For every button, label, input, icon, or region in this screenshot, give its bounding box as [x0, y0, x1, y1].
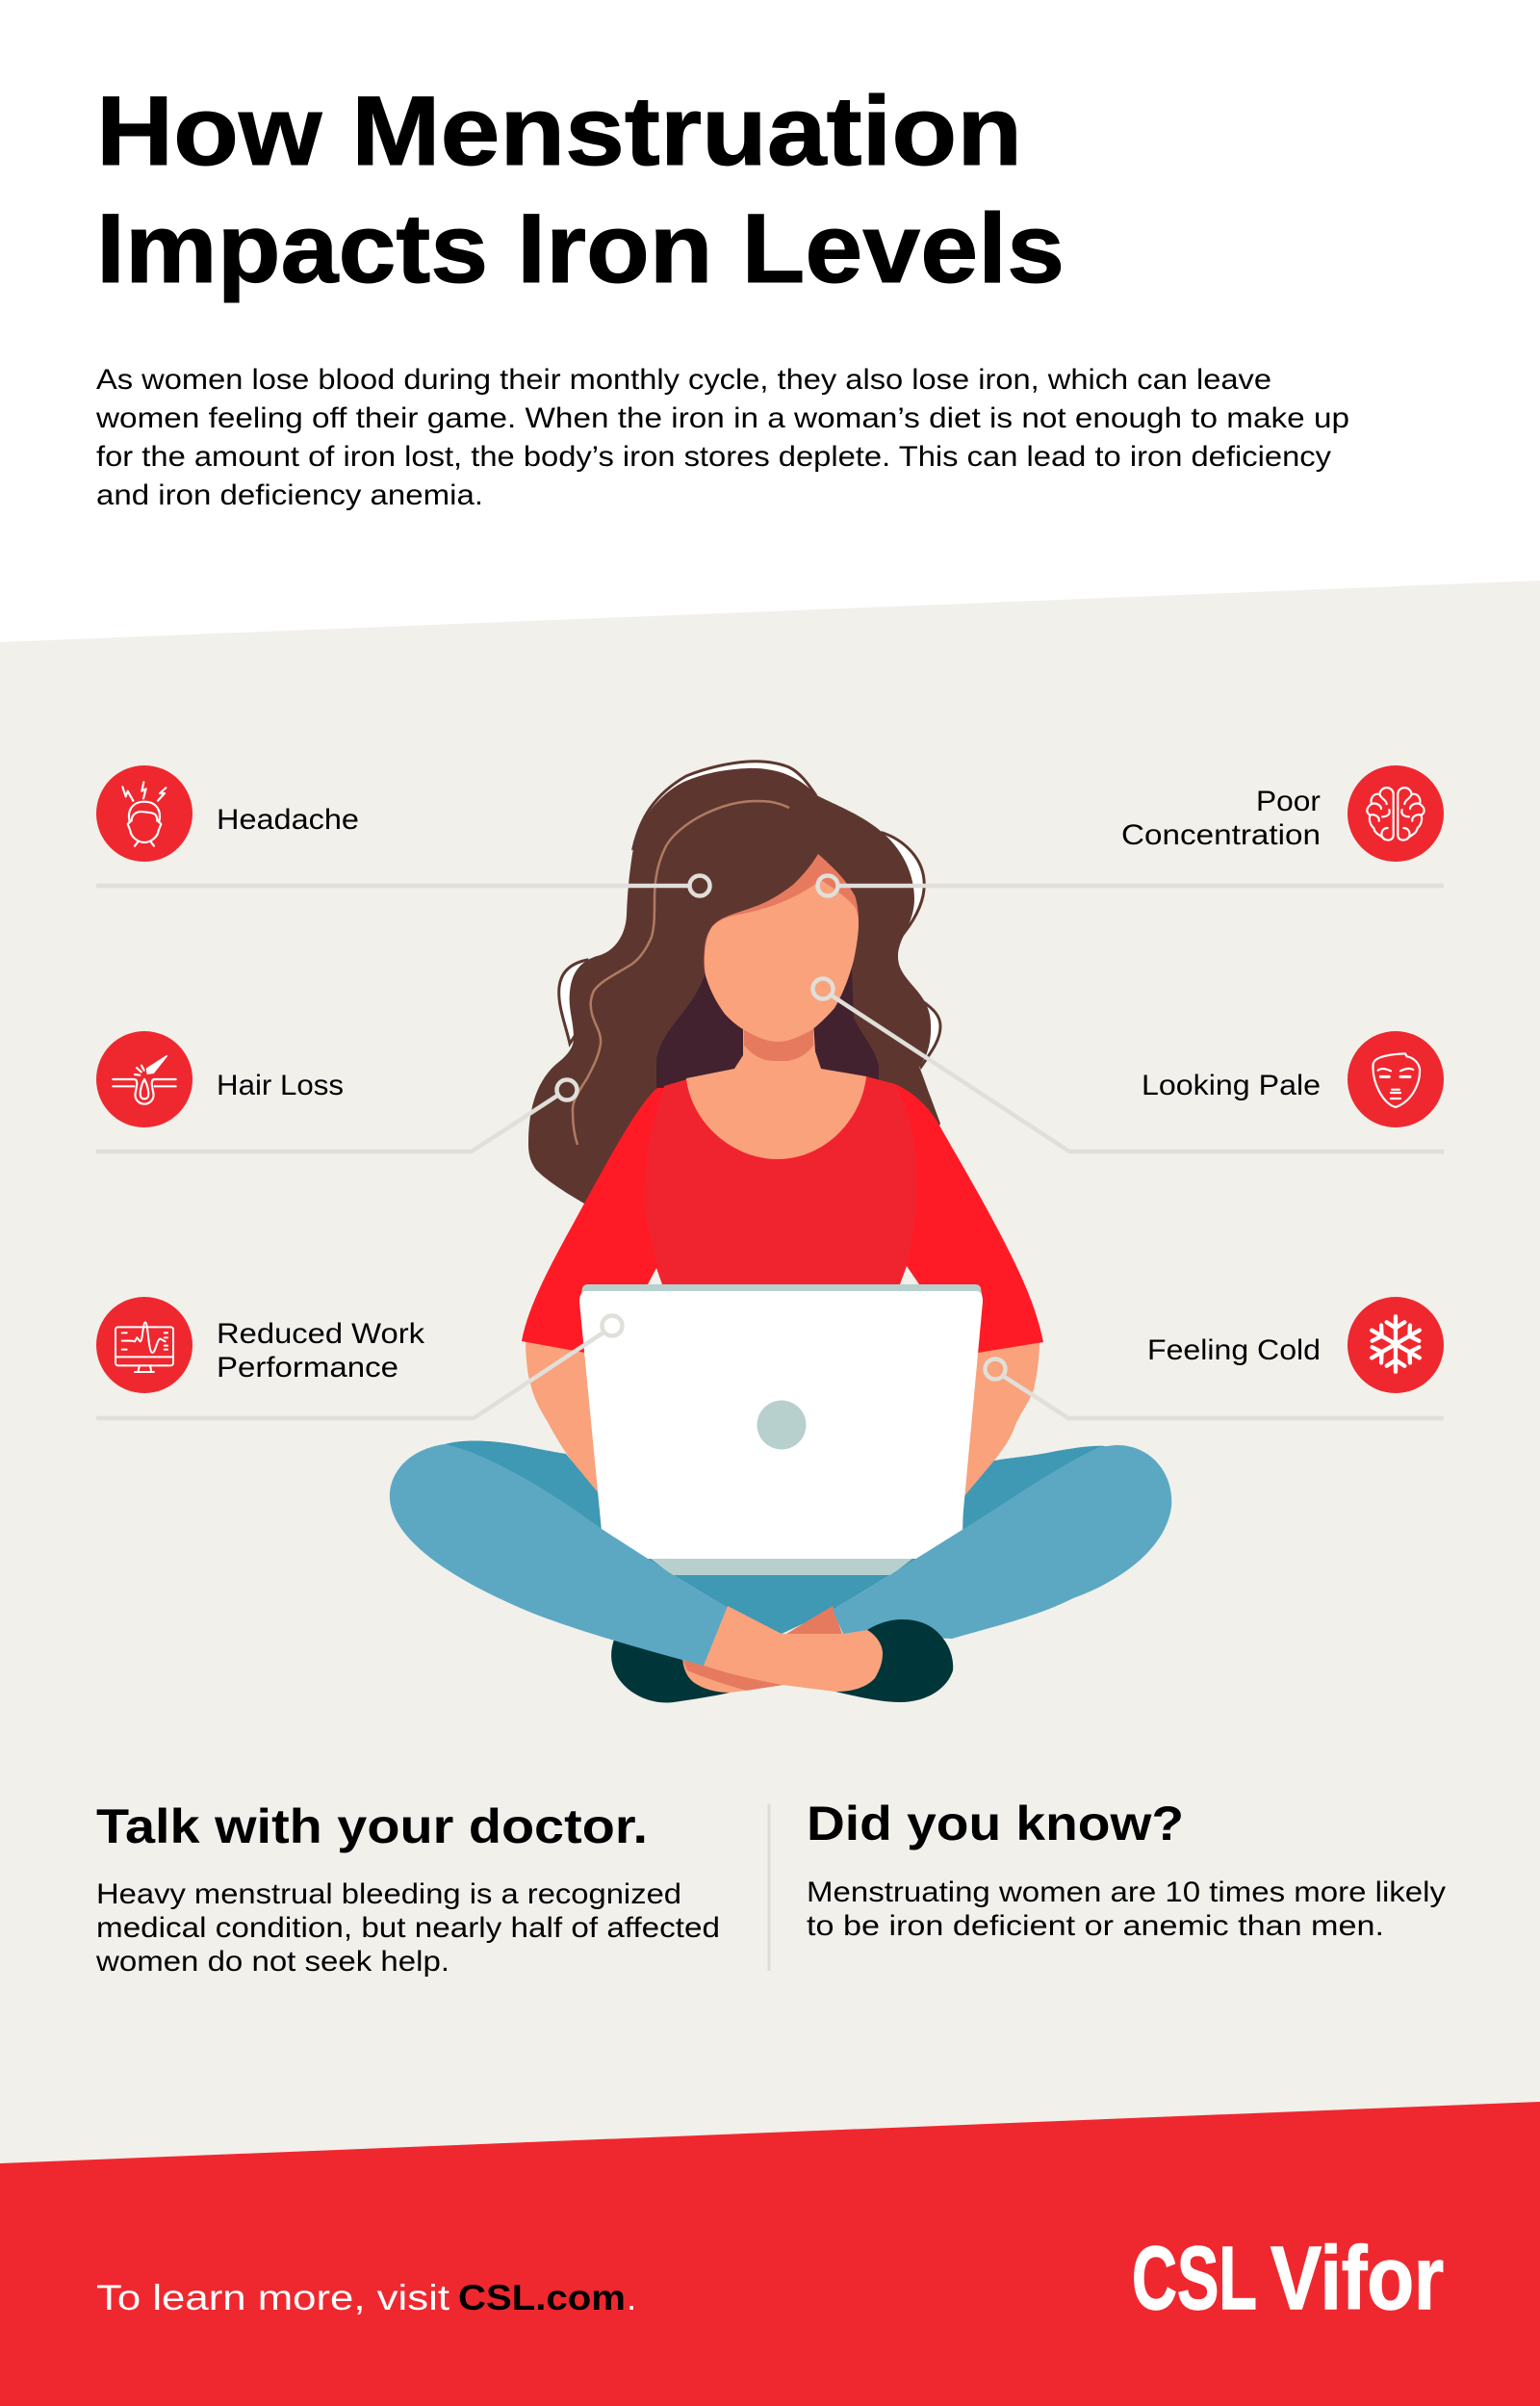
title: Impacts Iron Levels	[96, 194, 1065, 303]
upper foot	[704, 1606, 883, 1692]
text block: doctor advice: medical condition, but nearly half of affected	[96, 1912, 720, 1944]
text block: doctor advice	[95, 1878, 720, 1978]
connector rings	[556, 876, 1005, 1379]
neck and chest	[686, 1021, 866, 1159]
label: reduced work performance: Reduced Work	[217, 1318, 425, 1350]
left shoe	[611, 1640, 730, 1702]
logo: CSL Vifor: CSL	[1132, 2228, 1257, 2328]
connector lines	[96, 886, 1444, 1418]
label: feeling cold: Feeling Cold	[1147, 1334, 1321, 1366]
label: reduced work performance: Performance	[217, 1352, 398, 1384]
shirt sleeves	[522, 1084, 1043, 1353]
right leg	[833, 1445, 1171, 1639]
footer call to action: To learn more, visit	[96, 2278, 450, 2317]
hair	[528, 768, 940, 1203]
left leg	[390, 1444, 728, 1666]
logo: CSL Vifor: Vifor	[1270, 2228, 1444, 2328]
label: headache: Headache	[217, 804, 359, 836]
intro text block: and iron deficiency anemia.	[96, 479, 483, 511]
hair outline strands	[559, 762, 940, 1067]
footer call to action	[96, 2278, 636, 2317]
heading: talk with your doctor: Talk with your doctor.	[96, 1799, 648, 1853]
icon: headache	[96, 765, 192, 862]
label: hair loss: Hair Loss	[217, 1070, 344, 1101]
label: poor concentration	[1121, 786, 1321, 851]
hair highlight strand	[573, 801, 789, 1145]
intro text block	[95, 364, 1349, 511]
shirt torso	[645, 1076, 916, 1286]
text block: doctor advice: women do not seek help.	[95, 1946, 449, 1978]
lower foot and shadow	[682, 1606, 843, 1693]
title: How Menstruation	[96, 76, 1022, 186]
panel: did you know	[807, 1797, 1446, 1942]
icon: hair loss	[96, 1031, 192, 1127]
icon: looking pale	[1348, 1031, 1444, 1127]
footer call to action: CSL.com	[458, 2278, 626, 2317]
text block: did you know fact	[807, 1876, 1446, 1942]
figure: woman with laptop	[96, 762, 1444, 1702]
text block: doctor advice: Heavy menstrual bleeding is a recognized	[96, 1878, 681, 1910]
face	[705, 880, 859, 1042]
panel: talk with your doctor	[95, 1799, 720, 1978]
arms	[526, 1338, 1040, 1507]
label: poor concentration: Poor	[1256, 786, 1321, 817]
footer call to action: .	[627, 2278, 636, 2317]
intro text block: for the amount of iron lost, the body’s iron stores deplete. This can lead to iron deficiency	[96, 441, 1331, 473]
face shadow	[704, 854, 859, 1042]
neck shadow	[744, 1021, 813, 1061]
logo: CSL Vifor	[1132, 2228, 1444, 2328]
right shoe	[835, 1619, 953, 1702]
laptop	[579, 1284, 983, 1575]
title	[96, 76, 1065, 303]
panel: beige background	[0, 581, 1540, 2166]
icon: reduced work performance	[96, 1297, 192, 1393]
inner dark hair	[656, 968, 879, 1093]
label: poor concentration: Concentration	[1121, 819, 1321, 851]
text block: did you know fact: to be iron deficient or anemic than men.	[807, 1910, 1384, 1942]
label: looking pale: Looking Pale	[1142, 1070, 1321, 1101]
intro text block: women feeling off their game. When the iron in a woman’s diet is not enough to make up	[95, 402, 1349, 434]
panel: red footer band	[0, 2102, 1540, 2406]
label: reduced work performance	[217, 1318, 425, 1384]
shirt gaps	[648, 1266, 919, 1284]
icon: feeling cold	[1348, 1297, 1444, 1393]
legs back	[445, 1440, 1105, 1634]
intro text block: As women lose blood during their monthly cycle, they also lose iron, which can leave	[96, 364, 1271, 396]
text block: did you know fact: Menstruating women are 10 times more likely	[807, 1876, 1446, 1908]
icon: poor concentration	[1348, 765, 1444, 862]
heading: did you know: Did you know?	[807, 1797, 1184, 1850]
